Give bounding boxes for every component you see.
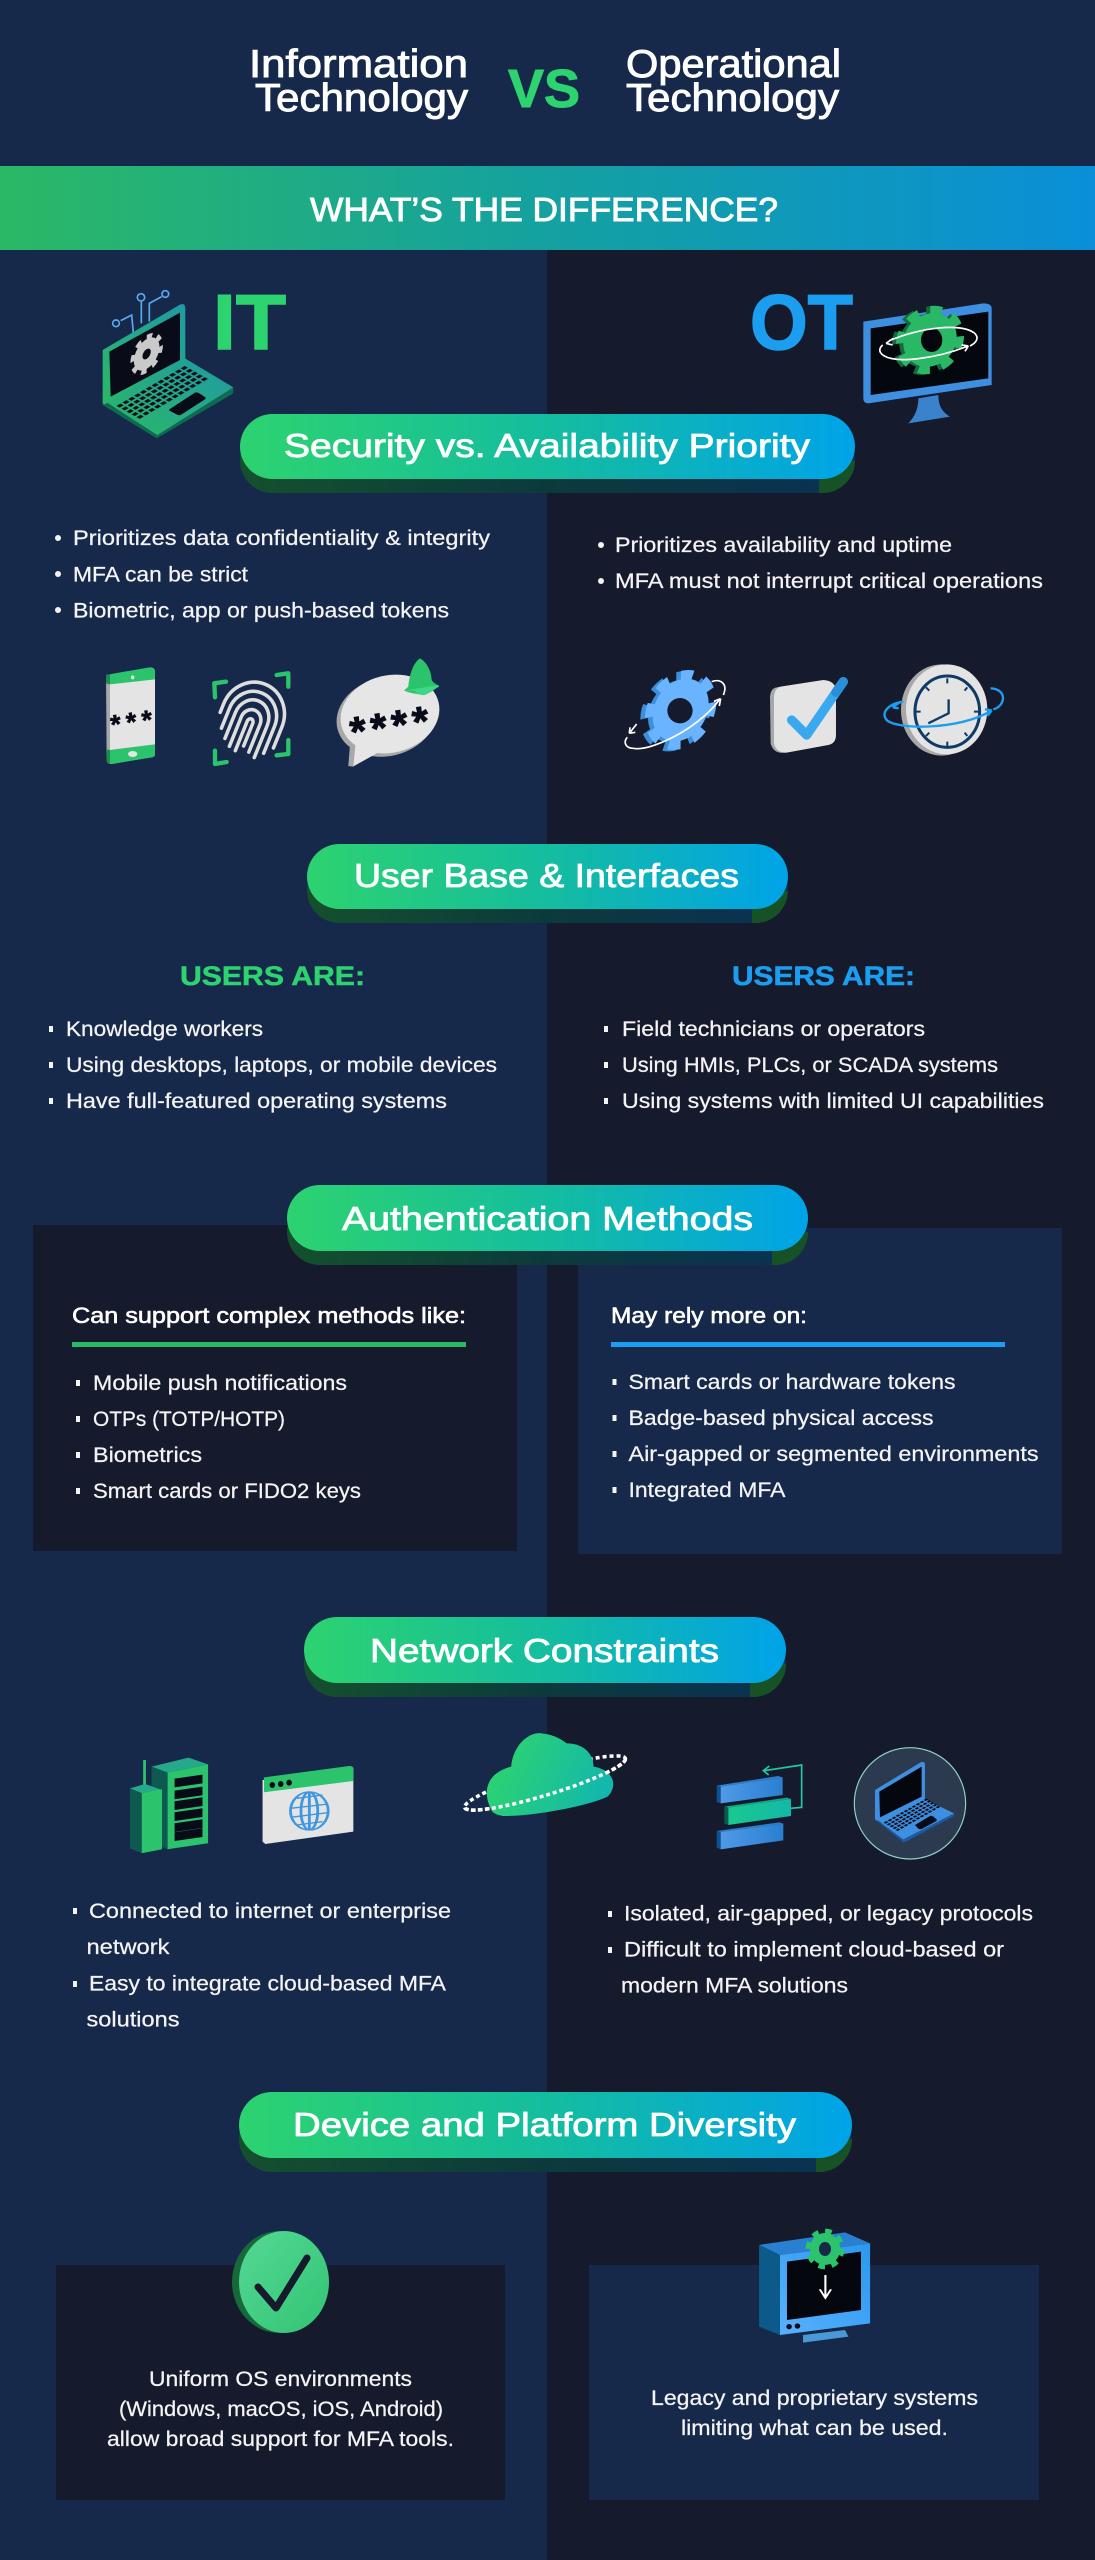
pill heading: User Base & Interfaces: User Base & Interfaces [354, 857, 739, 894]
IT network bullets: network [86, 1935, 170, 1959]
panel: legacy and proprietary systems [589, 2265, 1039, 2500]
OT availability bullets [598, 533, 1043, 593]
OT network bullets: Difficult to implement cloud-based or [624, 1938, 1004, 1962]
icon: green check badge [232, 2231, 329, 2333]
pill heading: Authentication Methods: Authentication Methods [342, 1200, 753, 1237]
panel: IT authentication methods: Biometrics [93, 1443, 202, 1467]
IT users bullets: Have full-featured operating systems [66, 1089, 447, 1113]
icon: legacy monitor with gear [759, 2231, 870, 2343]
background: IT side [0, 0, 547, 2560]
header background [0, 0, 1095, 166]
OT availability bullets: Prioritizes availability and uptime [615, 533, 952, 557]
title: Operational Technology: Technology [626, 77, 840, 120]
panel: IT authentication methods [33, 1225, 517, 1551]
OT users bullets [604, 1017, 1044, 1113]
IT security bullets [55, 526, 490, 622]
icon: checkbox [770, 680, 843, 753]
panel: uniform OS environments: Uniform OS environments [149, 2367, 412, 2391]
icon: phone with passcode [106, 667, 155, 764]
panel: IT authentication methods: Can support complex methods like: [72, 1303, 466, 1328]
icon: browser window with globe [263, 1766, 353, 1844]
IT network bullets [73, 1899, 451, 2032]
pill heading: Network Constraints [304, 1617, 786, 1697]
pill heading: User Base & Interfaces [307, 844, 788, 923]
IT security bullets: MFA can be strict [73, 562, 248, 586]
title: VS: VS [508, 59, 580, 119]
title: Information Technology: Technology [255, 77, 469, 120]
panel: uniform OS environments [56, 2265, 505, 2500]
icon: chat bubble with password and bell: **** [347, 697, 433, 756]
heading: IT: IT [213, 278, 286, 366]
IT users bullets: Knowledge workers [66, 1017, 263, 1041]
icon: IT laptop [103, 291, 233, 438]
OT users bullets: Using systems with limited UI capabilities [622, 1089, 1044, 1113]
panel: OT authentication methods: Badge-based physical access [628, 1406, 934, 1430]
title: Information Technology: Information [249, 43, 468, 86]
panel: uniform OS environments: allow broad support for MFA tools. [107, 2427, 454, 2451]
banner: what's the difference [0, 166, 1095, 250]
OT users bullets: Field technicians or operators [622, 1017, 925, 1041]
IT users bullets: Using desktops, laptops, or mobile devices [66, 1053, 497, 1077]
icon: blue laptop in circle [854, 1748, 966, 1859]
IT security bullets: Biometric, app or push-based tokens [73, 598, 449, 622]
pill heading: Network Constraints: Network Constraints [370, 1632, 719, 1669]
panel: OT authentication methods [578, 1228, 1062, 1554]
banner: what's the difference: WHAT’S THE DIFFERENCE? [310, 192, 778, 229]
panel: OT authentication methods: Air-gapped or segmented environments [628, 1442, 1038, 1466]
icon: stacked blocks with arrow [717, 1765, 802, 1849]
heading: OT users are: USERS ARE: [732, 961, 915, 991]
IT network bullets: Connected to internet or enterprise [89, 1899, 451, 1923]
panel: legacy and proprietary systems: Legacy and proprietary systems [651, 2386, 978, 2410]
heading: IT users are: USERS ARE: [180, 961, 365, 991]
IT security bullets: Prioritizes data confidentiality & integrity [73, 526, 490, 550]
panel: OT authentication methods: Integrated MFA [628, 1478, 786, 1502]
panel: IT authentication methods: OTPs (TOTP/HOTP) [93, 1407, 285, 1431]
title [249, 43, 841, 120]
title: Operational Technology [626, 43, 841, 120]
OT users bullets: Using HMIs, PLCs, or SCADA systems [622, 1053, 998, 1077]
icon: chat bubble with password and bell [328, 658, 448, 767]
OT availability bullets: MFA must not interrupt critical operations [615, 569, 1043, 593]
icon: cloud with orbit [461, 1733, 629, 1819]
pill heading: Device and Platform Diversity [239, 2092, 852, 2172]
pill heading: Device and Platform Diversity: Device and Platform Diversity [293, 2106, 797, 2143]
IT network bullets: Easy to integrate cloud-based MFA [89, 1972, 447, 1996]
pill heading: Security vs. Availability Priority [240, 414, 855, 493]
icon: phone with passcode: *** [109, 704, 155, 740]
OT network bullets: modern MFA solutions [621, 1974, 848, 1998]
icon: office building [130, 1758, 208, 1853]
icon: clock with orbit [885, 664, 1003, 756]
pill heading: Security vs. Availability Priority: Security vs. Availability Priority [284, 427, 811, 464]
IT network bullets: solutions [86, 2008, 180, 2032]
OT network bullets: Isolated, air-gapped, or legacy protocols [624, 1902, 1033, 1926]
title: Information Technology [249, 43, 469, 120]
OT network bullets [608, 1902, 1033, 1998]
icon: fingerprint scan [209, 673, 294, 764]
heading: OT: OT [750, 278, 853, 366]
panel: IT authentication methods: Mobile push notifications [93, 1371, 347, 1395]
title: Operational Technology: Operational [626, 43, 841, 86]
icon: blue gear with orbit [625, 668, 725, 753]
panel: uniform OS environments: (Windows, macOS, iOS, Android) [119, 2397, 443, 2421]
panel: OT authentication methods: Smart cards or hardware tokens [628, 1370, 956, 1394]
panel: OT authentication methods: May rely more on: [611, 1303, 807, 1328]
panel: IT authentication methods: Smart cards or FIDO2 keys [93, 1479, 361, 1503]
pill heading: Authentication Methods [287, 1185, 808, 1265]
background: OT side [547, 250, 1095, 2560]
icon: OT monitor with gear [863, 303, 992, 423]
panel: legacy and proprietary systems: limiting what can be used. [681, 2416, 948, 2440]
IT users bullets [49, 1017, 497, 1113]
